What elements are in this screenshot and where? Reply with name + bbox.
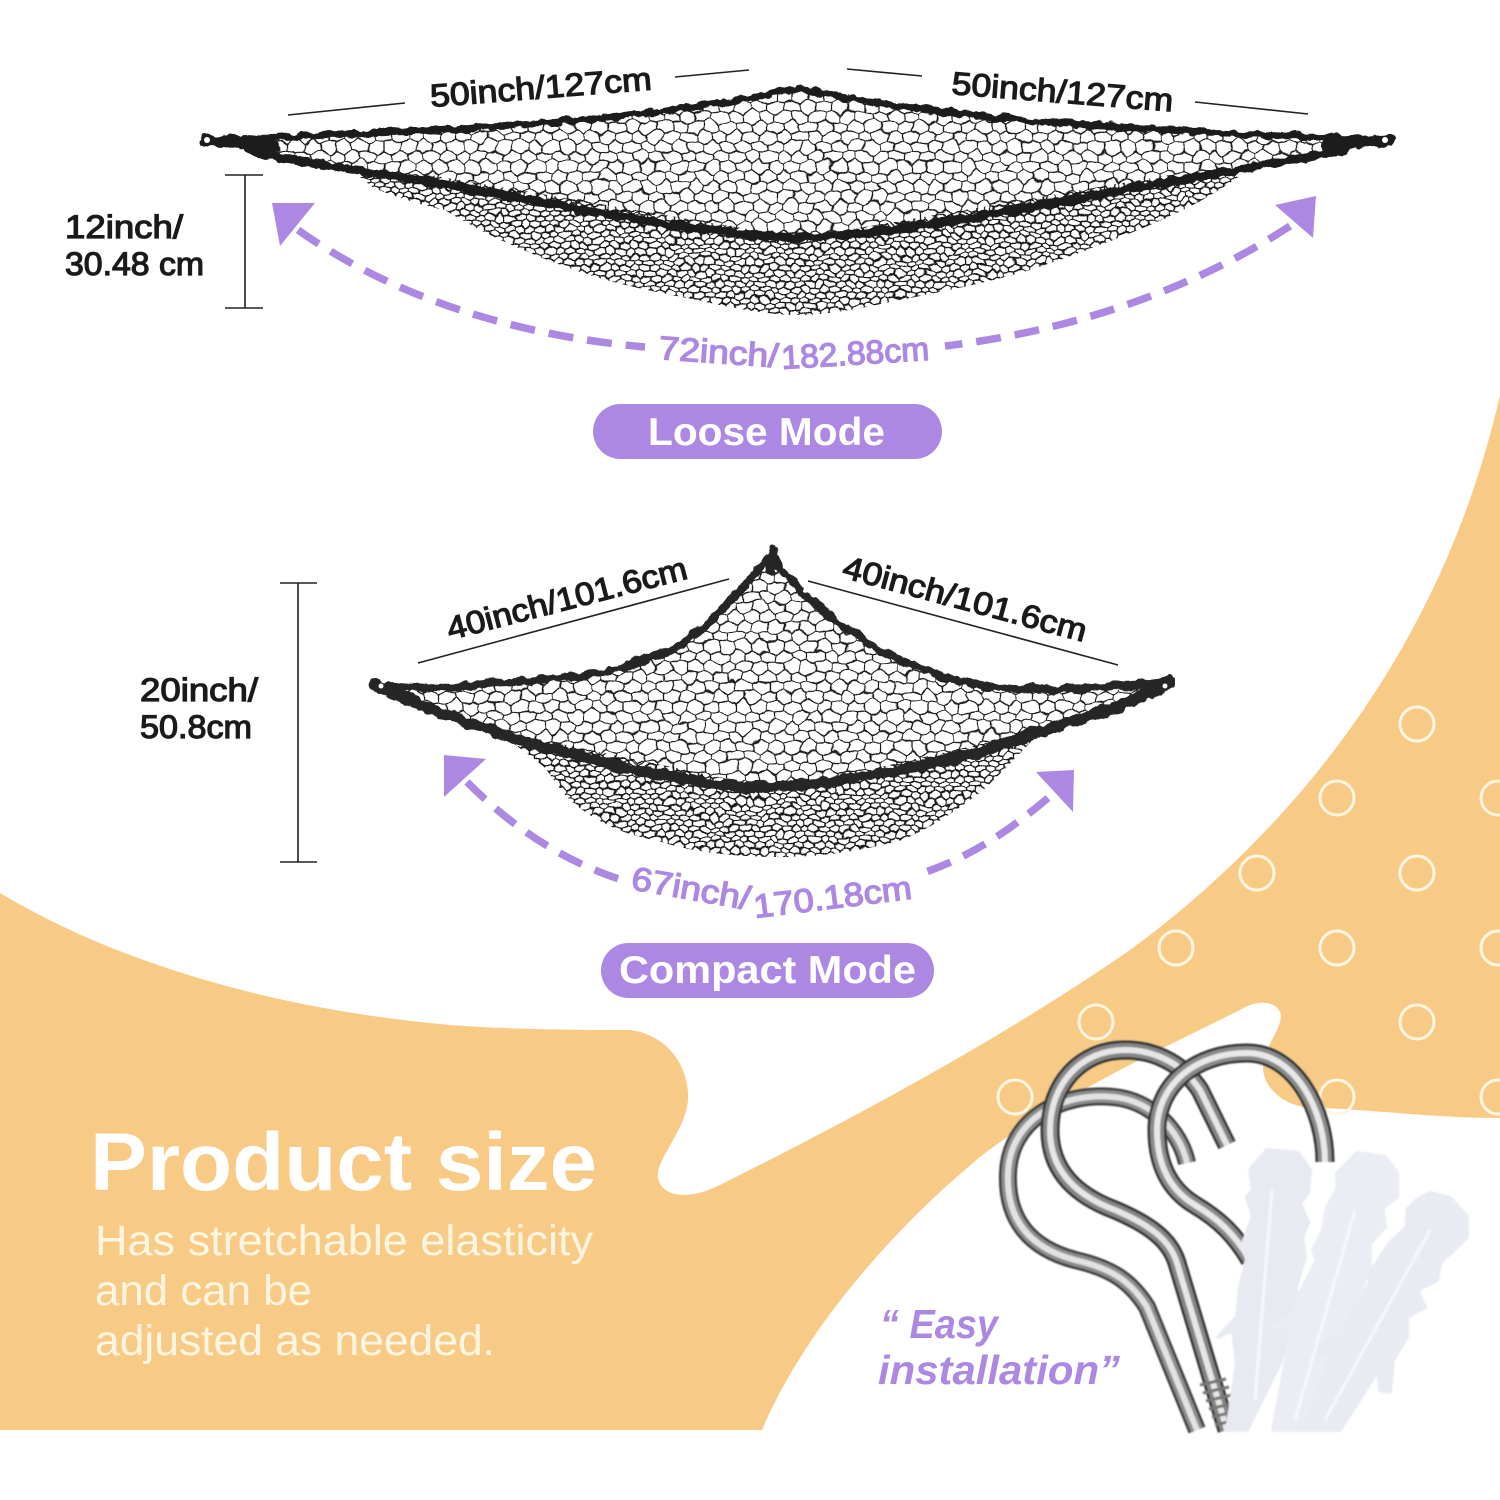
label: compact mode span: 67inch/ <box>629 859 754 917</box>
hook 3 <box>1157 1053 1325 1260</box>
height label: 30.48 cm <box>65 246 204 282</box>
height bracket <box>280 583 317 862</box>
badge: loose mode <box>593 404 942 459</box>
left side length label: 40inch/101.6cm <box>443 550 691 647</box>
badge: compact mode <box>601 943 934 998</box>
label: loose mode span: 72inch/ <box>658 329 781 374</box>
height label: 50.8cm <box>140 709 252 745</box>
length guide lines <box>288 69 1308 115</box>
label: loose mode span: 182.88cm <box>780 330 930 376</box>
heading: product size: Product size <box>90 1117 597 1208</box>
right side length label: 40inch/101.6cm <box>839 549 1091 649</box>
icon: plastic wall anchors <box>1218 1150 1467 1430</box>
panel: loose mode net <box>200 84 1396 315</box>
text block: description: and can be <box>95 1267 312 1315</box>
icon: screw hooks <box>1008 1050 1325 1430</box>
panel: compact mode net <box>370 548 1180 865</box>
label: compact mode span <box>629 859 914 925</box>
anchor 2 <box>1273 1153 1397 1430</box>
arrow: compact mode span <box>444 755 1074 880</box>
badge: compact mode: Compact Mode <box>619 949 916 992</box>
anchor ribs <box>1255 1190 1430 1420</box>
panel: loose mode dimension labels <box>65 61 1308 308</box>
top right length label: 50inch/127cm <box>950 65 1175 118</box>
label: loose mode span <box>658 329 930 376</box>
panel: orange wave background <box>0 395 1500 1430</box>
hook 2 <box>1050 1050 1227 1430</box>
length guide lines <box>418 579 1118 665</box>
panel: compact mode dimension labels <box>140 549 1118 862</box>
text block: easy installation: “ Easy <box>880 1301 1000 1347</box>
label: compact mode span: 170.18cm <box>751 869 914 925</box>
text block: description: Has stretchable elasticity <box>95 1217 594 1265</box>
height label: 20inch/ <box>140 672 258 708</box>
badge: loose mode: Loose Mode <box>648 411 885 454</box>
anchor 1 <box>1218 1150 1310 1430</box>
text block: easy installation: installation” <box>878 1347 1120 1393</box>
screw thread <box>1200 1379 1241 1425</box>
height label: 12inch/ <box>65 209 183 245</box>
decorative ring pattern <box>998 707 1500 1114</box>
text block: description: adjusted as needed. <box>95 1317 495 1365</box>
arrow: loose mode span <box>272 196 1316 347</box>
hook 1 <box>1008 1096 1197 1430</box>
top left length label: 50inch/127cm <box>429 61 653 114</box>
height bracket <box>225 175 263 308</box>
anchor 3 <box>1303 1193 1467 1430</box>
